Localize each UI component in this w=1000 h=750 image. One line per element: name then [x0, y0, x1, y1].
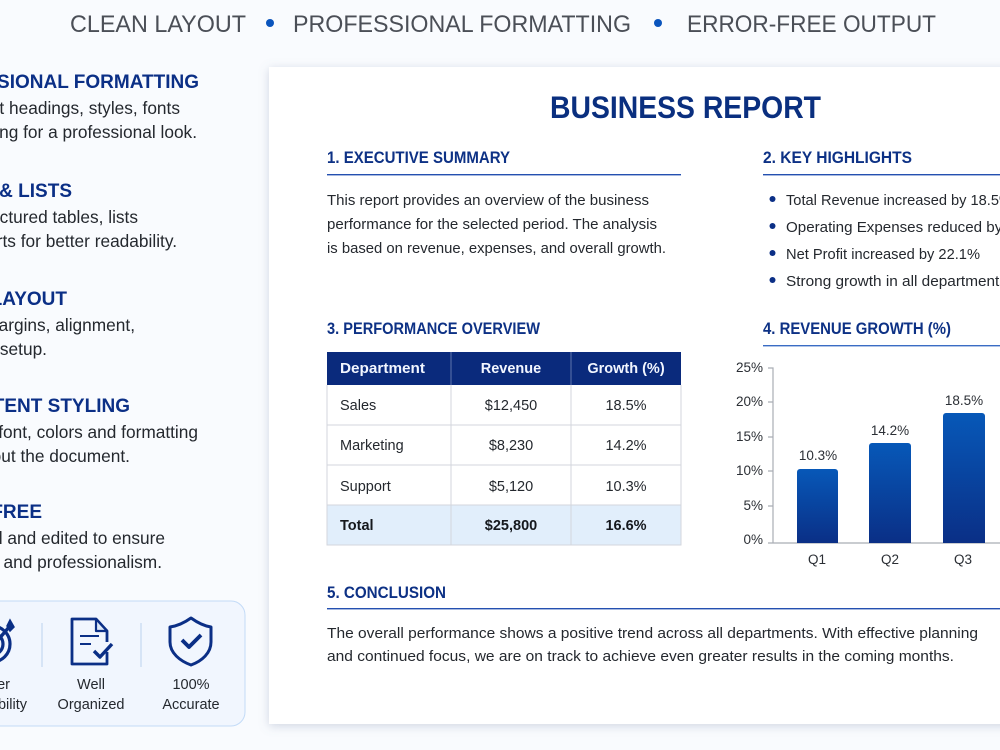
bar chart: 14.2% — [871, 423, 909, 438]
table: department performance — [327, 352, 681, 545]
section 5: conclusion: The overall performance shows a positive trend across all departments. With effective planning — [327, 626, 978, 642]
table: department performance: $8,230 — [489, 438, 533, 454]
section 5: conclusion: and continued focus, we are on track to achieve even greater results in the coming months. — [327, 649, 954, 665]
section 2: key highlights: Net Profit increased by 22.1% — [786, 247, 980, 263]
bar chart — [736, 360, 1000, 567]
bar chart: 5% — [743, 498, 763, 513]
table: department performance: 18.5% — [605, 398, 647, 414]
badge label: accurate: 100% — [172, 677, 210, 693]
bar chart: Q1 — [808, 552, 826, 567]
top banner: feature tagline: CLEAN LAYOUT — [70, 11, 246, 38]
icon: target — [0, 620, 14, 662]
table: department performance: 16.6% — [605, 518, 647, 534]
table: department performance: Marketing — [340, 438, 404, 454]
feature: professional formatting — [0, 72, 199, 142]
bar chart: 10.3% — [799, 448, 837, 463]
icon: document with check — [72, 619, 112, 664]
bar chart: 0% — [743, 532, 763, 547]
section 4: revenue growth chart: 4. REVENUE GROWTH (%) — [763, 320, 951, 338]
badge label: accurate — [162, 677, 220, 713]
badge panel — [0, 601, 245, 726]
table: department performance: Total — [340, 518, 374, 534]
bar chart: 20% — [736, 394, 763, 409]
report title: BUSINESS REPORT — [550, 89, 821, 125]
icon: shield with check — [170, 618, 211, 665]
section 3: performance overview — [327, 320, 681, 545]
section 1: executive summary: 1. EXECUTIVE SUMMARY — [327, 149, 510, 167]
badge label: accurate: Accurate — [162, 697, 220, 713]
bar chart: Q3 — [954, 552, 972, 567]
table: department performance: 14.2% — [605, 438, 647, 454]
top banner: feature tagline: ERROR-FREE OUTPUT — [687, 11, 936, 38]
table: department performance: $12,450 — [485, 398, 537, 414]
feature: error free — [0, 502, 165, 572]
top banner: feature tagline — [70, 11, 936, 38]
section 5: conclusion — [327, 584, 1000, 665]
bar chart: 25% — [736, 360, 763, 375]
left column: feature list — [0, 72, 199, 572]
section 3: performance overview: 3. PERFORMANCE OVERVIEW — [327, 320, 540, 338]
section 2: key highlights: 2. KEY HIGHLIGHTS — [763, 149, 912, 167]
table: department performance: Revenue — [481, 361, 541, 377]
feature: clean layout — [0, 289, 135, 359]
bar chart: 18.5% — [945, 393, 983, 408]
table: department performance: 10.3% — [605, 479, 647, 495]
section 4: revenue growth chart — [736, 320, 1000, 567]
section 1: executive summary — [327, 149, 681, 257]
bar chart: 15% — [736, 429, 763, 444]
table: department performance: Department — [340, 361, 425, 377]
section 1: executive summary: This report provides an overview of the business — [327, 193, 649, 209]
section 5: conclusion: 5. CONCLUSION — [327, 584, 446, 602]
bar chart: Q2 — [881, 552, 899, 567]
table: department performance: Sales — [340, 398, 376, 414]
table: department performance: Growth (%) — [587, 361, 665, 377]
top banner: feature tagline: PROFESSIONAL FORMATTING — [293, 11, 631, 38]
section 2: key highlights — [763, 149, 1000, 290]
report page panel — [269, 67, 1000, 724]
table: department performance: $25,800 — [485, 518, 537, 534]
feature: content styling — [0, 396, 198, 466]
badge label: well organized — [58, 677, 124, 713]
bar chart: 10% — [736, 463, 763, 478]
table: department performance: $5,120 — [489, 479, 533, 495]
section 1: executive summary: is based on revenue, expenses, and overall growth. — [327, 241, 666, 257]
table: department performance: Support — [340, 479, 391, 495]
badge label: better readability — [0, 677, 28, 713]
section 1: executive summary: performance for the selected period. The analysis — [327, 217, 657, 233]
feature: tables and lists — [0, 181, 177, 251]
section 2: key highlights: Strong growth in all departments — [786, 274, 1000, 290]
badge label: well organized: Organized — [58, 697, 124, 713]
badge label: well organized: Well — [77, 677, 105, 693]
